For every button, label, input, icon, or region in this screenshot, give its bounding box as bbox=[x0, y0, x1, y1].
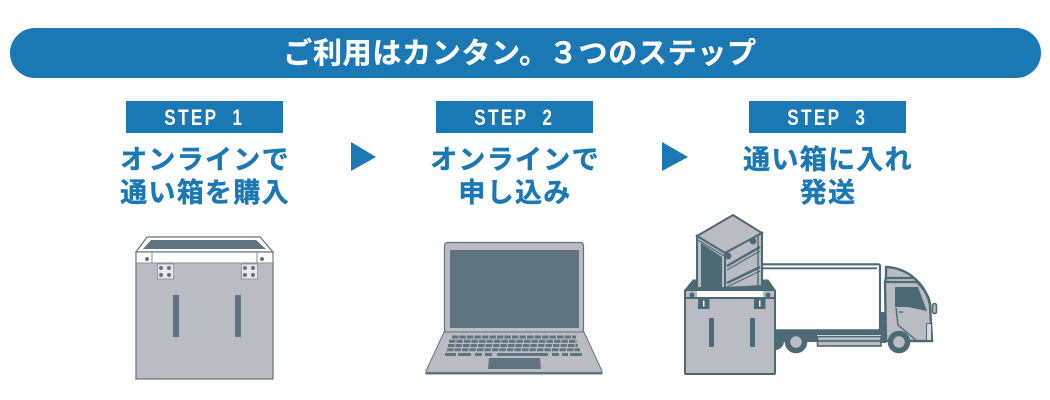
step 1 badge: STEP 1 bbox=[165, 105, 244, 130]
step 1 badge bbox=[126, 101, 283, 133]
step 3 badge: STEP 3 bbox=[788, 105, 867, 130]
step 3 heading: 通い箱に入れ bbox=[743, 145, 913, 175]
icon: returnable box bbox=[136, 237, 273, 379]
step 2 heading bbox=[430, 145, 600, 208]
case bbox=[697, 215, 762, 288]
step 1 heading bbox=[120, 145, 290, 208]
step 3 heading bbox=[743, 145, 913, 208]
step 1 heading: オンラインで bbox=[120, 145, 290, 175]
step 2 heading: 申し込み bbox=[458, 178, 572, 208]
arrow: step 2 to step 3 bbox=[662, 142, 688, 171]
box bbox=[685, 280, 775, 374]
step 2 heading: オンラインで bbox=[430, 145, 600, 175]
step 2 badge: STEP 2 bbox=[475, 105, 554, 130]
step 3 badge bbox=[749, 101, 906, 133]
step 1 heading: 通い箱を購入 bbox=[120, 178, 290, 208]
step 2 badge bbox=[436, 101, 593, 133]
icon: truck with box and case bbox=[685, 215, 936, 374]
icon: laptop bbox=[426, 242, 602, 374]
step 3 heading: 発送 bbox=[800, 178, 856, 208]
title banner bbox=[10, 28, 1041, 78]
arrow: step 1 to step 2 bbox=[351, 142, 376, 171]
title banner: ご利用はカンタン。３つのステップ bbox=[283, 38, 757, 70]
truck bbox=[762, 264, 936, 350]
